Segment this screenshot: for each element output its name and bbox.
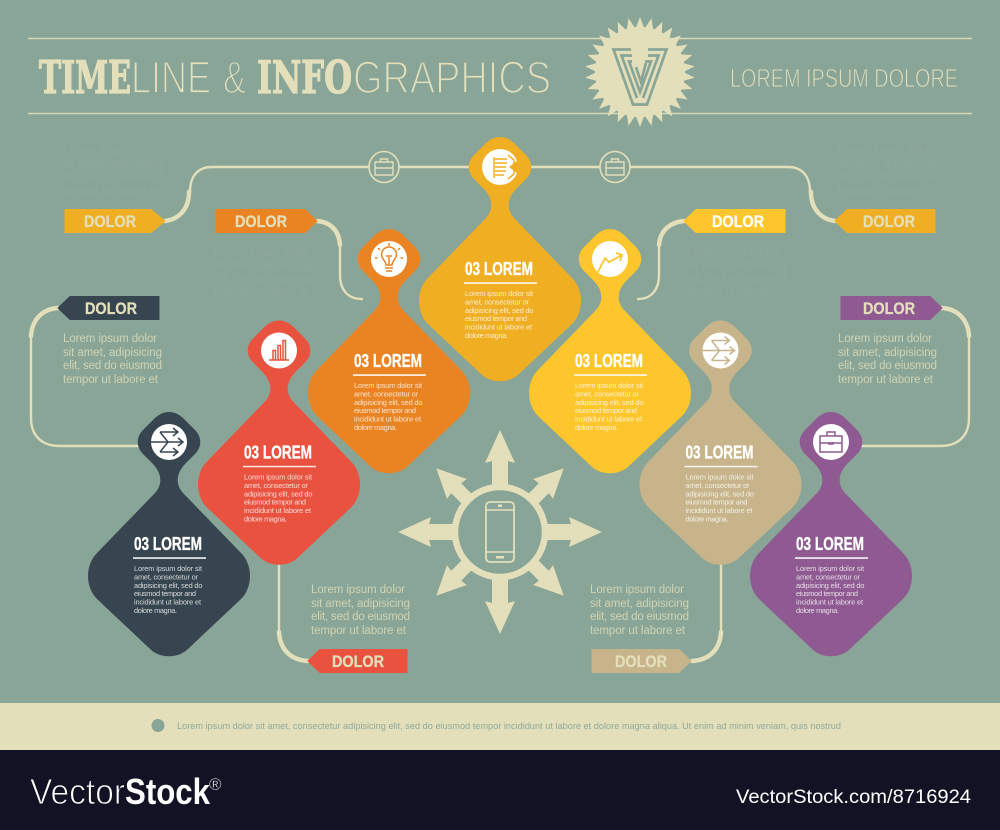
title: INFO — [257, 51, 352, 104]
text block: right — [838, 333, 937, 386]
ghost text: middle right: sit amet, adipisicing — [687, 260, 786, 272]
panel: purple pin: incididunt ut labore et — [796, 598, 863, 607]
connector: yellow — [638, 221, 684, 299]
panel: amber centre pin: eiusmod tempor and — [465, 314, 527, 323]
panel: purple pin: amet, consectetur or — [796, 572, 861, 581]
panel: tan pin: adipisicing elit, sed do — [686, 489, 754, 498]
title — [39, 51, 551, 104]
panel: yellow pin — [529, 229, 691, 473]
tag: red — [308, 650, 407, 672]
text block: right: tempor ut labore et — [838, 374, 934, 386]
ghost text: top left: elit, sed do eiusmod — [64, 172, 163, 184]
tag: tan — [592, 650, 691, 672]
panel: red pin — [198, 320, 360, 565]
text block: bottom left — [311, 584, 410, 637]
tag: dark: DOLOR — [85, 300, 137, 318]
tag: yellow: DOLOR — [712, 213, 764, 231]
icon: phone with radiating arrows — [398, 430, 602, 634]
text block: bottom left: elit, sed do eiusmod — [311, 611, 410, 623]
text block: left: Lorem ipsum dolor — [63, 333, 157, 345]
ghost text: middle left: sit amet, adipisicing — [214, 260, 313, 272]
text block: bottom left: Lorem ipsum dolor — [311, 584, 405, 596]
panel: amber centre pin: incididunt ut labore et — [465, 323, 532, 332]
text block: right: sit amet, adipisicing — [838, 347, 937, 359]
panel: tan pin: dolore magna. — [686, 514, 728, 524]
ghost text: top left: sit amet, adipisicing — [64, 159, 163, 171]
panel: amber centre pin: 03 LOREM — [465, 259, 533, 279]
footer band: Lorem ipsum dolor sit amet, consectetur adipisicing elit, sed do eiusmod tempor incididunt ut labore et dolore magna aliqua. Ut enim ad minim veniam, quis nostrud — [177, 721, 841, 732]
watermark bar: Stock — [125, 771, 211, 812]
ghost text: top right: elit, sed do eiusmod — [838, 172, 937, 184]
footer band — [0, 703, 1000, 750]
ghost text: top right: tempor ut labore et — [838, 186, 934, 198]
ghost text: top right: sit amet, adipisicing — [838, 159, 937, 171]
panel: amber centre pin: amet, consectetur or — [465, 297, 530, 306]
panel: tan pin: 03 LOREM — [686, 442, 754, 462]
connector: purple — [858, 308, 969, 446]
icon: briefcase node left — [369, 152, 399, 182]
text block: bottom right — [590, 584, 689, 637]
panel: purple pin: 03 LOREM — [796, 534, 864, 554]
ghost text: top left — [64, 145, 163, 198]
panel: amber centre pin: dolore magna. — [465, 331, 508, 340]
text block: bottom right: tempor ut labore et — [590, 625, 686, 637]
tag: orange — [216, 210, 317, 232]
tag: red: DOLOR — [332, 653, 384, 671]
tag: amber left: DOLOR — [84, 213, 136, 231]
text block: right: Lorem ipsum dolor — [838, 333, 932, 345]
connector: top timeline — [165, 167, 835, 221]
panel: orange pin: Lorem ipsum dolor sit — [354, 381, 422, 390]
panel: tan pin: eiusmod tempor and — [686, 498, 748, 507]
tag: purple: DOLOR — [863, 300, 915, 318]
panel: red pin: amet, consectetur or — [244, 481, 309, 490]
panel: yellow pin: 03 LOREM — [575, 351, 643, 371]
panel: orange pin: eiusmod tempor and — [354, 406, 416, 415]
ghost text: top left: Lorem ipsum dolor — [64, 145, 158, 157]
tag: dark — [58, 296, 159, 320]
text block: right: elit, sed do eiusmod — [838, 360, 937, 372]
panel: yellow pin: dolore magna. — [575, 423, 618, 432]
panel: dark pin — [88, 412, 250, 656]
tag: amber right — [835, 210, 935, 232]
panel: amber centre pin: Lorem ipsum dolor sit — [465, 289, 533, 298]
text block: bottom right: Lorem ipsum dolor — [590, 584, 684, 596]
panel: dark pin: Lorem ipsum dolor sit — [134, 564, 202, 573]
ghost text: middle left: elit, sed do eiusmod — [214, 273, 313, 285]
panel: purple pin: eiusmod tempor and — [796, 589, 858, 598]
icon: briefcase node right — [600, 152, 630, 182]
ghost text: middle left: tempor ut labore et — [214, 286, 310, 298]
panel: amber centre pin — [419, 137, 581, 381]
tag: tan: DOLOR — [615, 653, 667, 671]
ghost text: top left: tempor ut labore et — [64, 186, 160, 198]
panel: orange pin: incididunt ut labore et — [354, 415, 421, 424]
tag: purple — [841, 296, 942, 320]
panel: purple pin: Lorem ipsum dolor sit — [796, 564, 864, 573]
text block: left: tempor ut labore et — [63, 374, 159, 386]
text block: left: elit, sed do eiusmod — [63, 360, 162, 372]
panel: dark pin: eiusmod tempor and — [134, 589, 196, 598]
panel: orange pin: amet, consectetur or — [354, 389, 419, 398]
connector: tan — [692, 560, 721, 661]
panel: red pin: Lorem ipsum dolor sit — [244, 472, 312, 482]
panel: red pin: incididunt ut labore et — [244, 506, 311, 515]
panel: red pin: adipisicing elit, sed do — [244, 489, 312, 498]
panel: tan pin: incididunt ut labore et — [686, 506, 752, 515]
connector: dark — [31, 308, 142, 446]
title: TIME — [39, 51, 131, 104]
connector: red — [279, 560, 308, 661]
title: LINE — [131, 52, 211, 103]
panel: red pin: 03 LOREM — [244, 442, 312, 462]
panel: tan pin: amet, consectetur or — [686, 481, 750, 490]
panel: dark pin: amet, consectetur or — [134, 572, 199, 581]
panel: tan pin: Lorem ipsum dolor sit — [686, 472, 754, 482]
panel: tan pin — [640, 320, 802, 565]
panel: purple pin: adipisicing elit, sed do — [796, 581, 864, 590]
panel: orange pin: dolore magna. — [354, 423, 397, 432]
text block: left — [63, 333, 162, 386]
panel: dark pin: incididunt ut labore et — [134, 598, 201, 607]
title: & — [223, 52, 246, 103]
ghost text: middle right: elit, sed do eiusmod — [687, 273, 786, 285]
panel: red pin: eiusmod tempor and — [244, 498, 306, 507]
watermark bar: VectorStock.com/8716924 — [736, 786, 971, 808]
panel: dark pin: dolore magna. — [134, 606, 177, 615]
watermark bar: Vector — [30, 771, 125, 812]
ghost text: middle right: Lorem ipsum dolor — [687, 247, 781, 259]
panel: yellow pin: incididunt ut labore et — [575, 415, 642, 424]
watermark bar: ® — [209, 775, 222, 794]
ghost text: middle left: Lorem ipsum dolor — [214, 247, 308, 259]
connector: orange — [317, 221, 362, 299]
panel: orange pin: 03 LOREM — [354, 351, 422, 371]
text block: bottom left: tempor ut labore et — [311, 625, 407, 637]
panel: yellow pin: amet, consectetur or — [575, 389, 640, 398]
text block: bottom left: sit amet, adipisicing — [311, 598, 410, 610]
tag: yellow — [684, 210, 785, 232]
tag: orange: DOLOR — [235, 213, 287, 231]
panel: yellow pin: Lorem ipsum dolor sit — [575, 381, 643, 390]
text block: bottom right: elit, sed do eiusmod — [590, 611, 689, 623]
panel: yellow pin: adipisicing elit, sed do — [575, 398, 644, 407]
panel: purple pin — [750, 412, 912, 656]
panel: purple pin: dolore magna. — [796, 606, 839, 615]
tag: amber left — [65, 210, 165, 232]
panel: orange pin — [308, 229, 470, 473]
title: GRAPHICS — [353, 52, 551, 103]
ghost text: middle right — [687, 247, 786, 298]
ghost text: middle left — [214, 247, 313, 298]
panel: dark pin: adipisicing elit, sed do — [134, 581, 202, 590]
ghost text: top right: Lorem ipsum dolor — [838, 145, 932, 157]
panel: red pin: dolore magna. — [244, 514, 287, 524]
panel: yellow pin: eiusmod tempor and — [575, 406, 637, 415]
tag: amber right: DOLOR — [863, 213, 915, 231]
watermark bar — [0, 750, 1000, 830]
panel: dark pin: 03 LOREM — [134, 534, 202, 554]
text block: bottom right: sit amet, adipisicing — [590, 598, 689, 610]
text block: left: sit amet, adipisicing — [63, 347, 162, 359]
ghost text: middle right: tempor ut labore et — [687, 286, 783, 298]
icon: seal badge — [585, 17, 695, 127]
ghost text: top right — [838, 145, 937, 198]
panel: amber centre pin: adipisicing elit, sed do — [465, 306, 534, 315]
panel: orange pin: adipisicing elit, sed do — [354, 398, 422, 407]
